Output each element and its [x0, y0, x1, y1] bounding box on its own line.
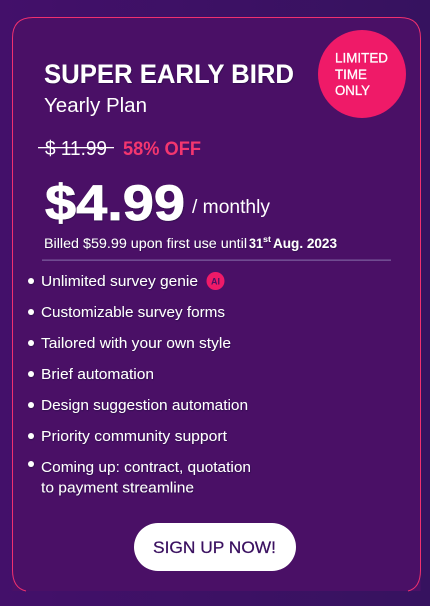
badge: limited time only: ONLY: [335, 82, 371, 98]
feature: design suggestion automation: Design suggestion automation: [41, 397, 248, 414]
badge: limited time only: [318, 30, 406, 118]
feature: unlimited survey genie: Unlimited survey genie: [41, 273, 198, 290]
icon: AI badge: AI: [211, 276, 220, 286]
title: SUPER EARLY BIRD: [44, 59, 294, 89]
billing note: Billed $59.99 upon first use until: [44, 236, 247, 251]
feature: coming up: to payment streamline: [41, 480, 194, 496]
billing note: 31: [249, 236, 263, 251]
billing note: st: [263, 235, 271, 244]
feature: priority community support: Priority community support: [41, 428, 228, 445]
billing note: Aug. 2023: [273, 236, 337, 251]
feature: coming up: [28, 459, 251, 496]
badge: limited time only: LIMITED: [335, 50, 388, 66]
feature: coming up: Coming up: contract, quotation: [41, 459, 251, 476]
subtitle: Yearly Plan: [44, 95, 147, 117]
discount: 58% OFF: [123, 139, 201, 160]
price period: / monthly: [192, 197, 270, 218]
badge: limited time only: TIME: [335, 66, 367, 82]
old price struck through: $ 11.99: [45, 138, 107, 160]
icon: AI badge: [206, 272, 224, 290]
current price: $4.99: [45, 175, 185, 231]
feature list: [28, 272, 251, 496]
feature: customizable survey forms: Customizable survey forms: [41, 304, 225, 321]
billing note: [44, 235, 337, 251]
feature: tailored style: Tailored with your own style: [41, 335, 231, 352]
feature: brief automation: Brief automation: [41, 366, 154, 383]
button: sign up now: [134, 523, 296, 571]
button: sign up now: SIGN UP NOW!: [153, 538, 276, 557]
